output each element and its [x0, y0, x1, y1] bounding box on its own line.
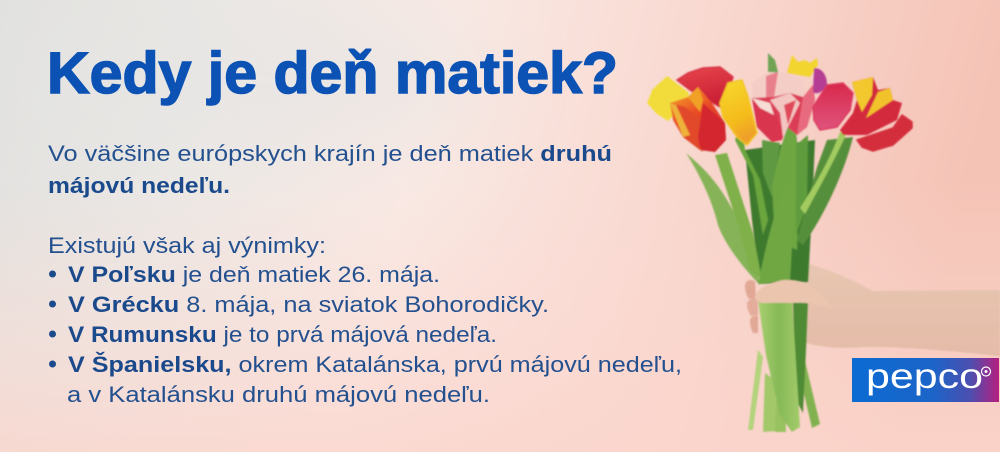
Poland: V Poľsku je deň matiek 26. mája. [68, 262, 440, 287]
exceptions list [49, 262, 682, 407]
tulip: yellow left [648, 77, 688, 120]
tulip: pink red [813, 83, 853, 130]
arm and back of hand [790, 263, 1000, 356]
intro paragraph: májovú nedeľu. [48, 173, 230, 198]
bullets [49, 270, 56, 368]
tulip: red back [677, 67, 733, 107]
Spain: V Španielsku, okrem Katalánska, prvú májovú nedeľu, [68, 352, 682, 377]
intro paragraph [48, 141, 612, 198]
pepco logo: pepco [866, 357, 983, 396]
tulip: orange red front [670, 87, 726, 152]
tulip: purple [813, 68, 827, 93]
tulip: pink white back [752, 72, 807, 100]
pepco logo [852, 357, 999, 402]
tulip: yellow red right [840, 77, 902, 135]
title: Kedy je deň matiek? [47, 41, 618, 106]
bouquet [648, 53, 912, 432]
intro paragraph: Vo väčšine európskych krajín je deň matiek druhú [48, 141, 612, 166]
lower stems [748, 300, 820, 432]
tulip: red low right [857, 115, 912, 151]
Romania: V Rumunsku je to prvá májová nedeľa. [68, 322, 497, 347]
exceptions intro: Existujú však aj výnimky: [48, 233, 326, 258]
Catalonia: a v Katalánsku druhú májovú nedeľu. [67, 382, 490, 407]
Greece: V Grécku 8. mája, na sviatok Bohorodičky. [68, 292, 549, 317]
tulip: pink white front [752, 85, 815, 142]
leaves and upper stems [686, 53, 853, 285]
tulip: yellow back right [787, 55, 818, 77]
fingers and thumb [745, 280, 832, 333]
tulip: yellow centre [720, 80, 757, 145]
